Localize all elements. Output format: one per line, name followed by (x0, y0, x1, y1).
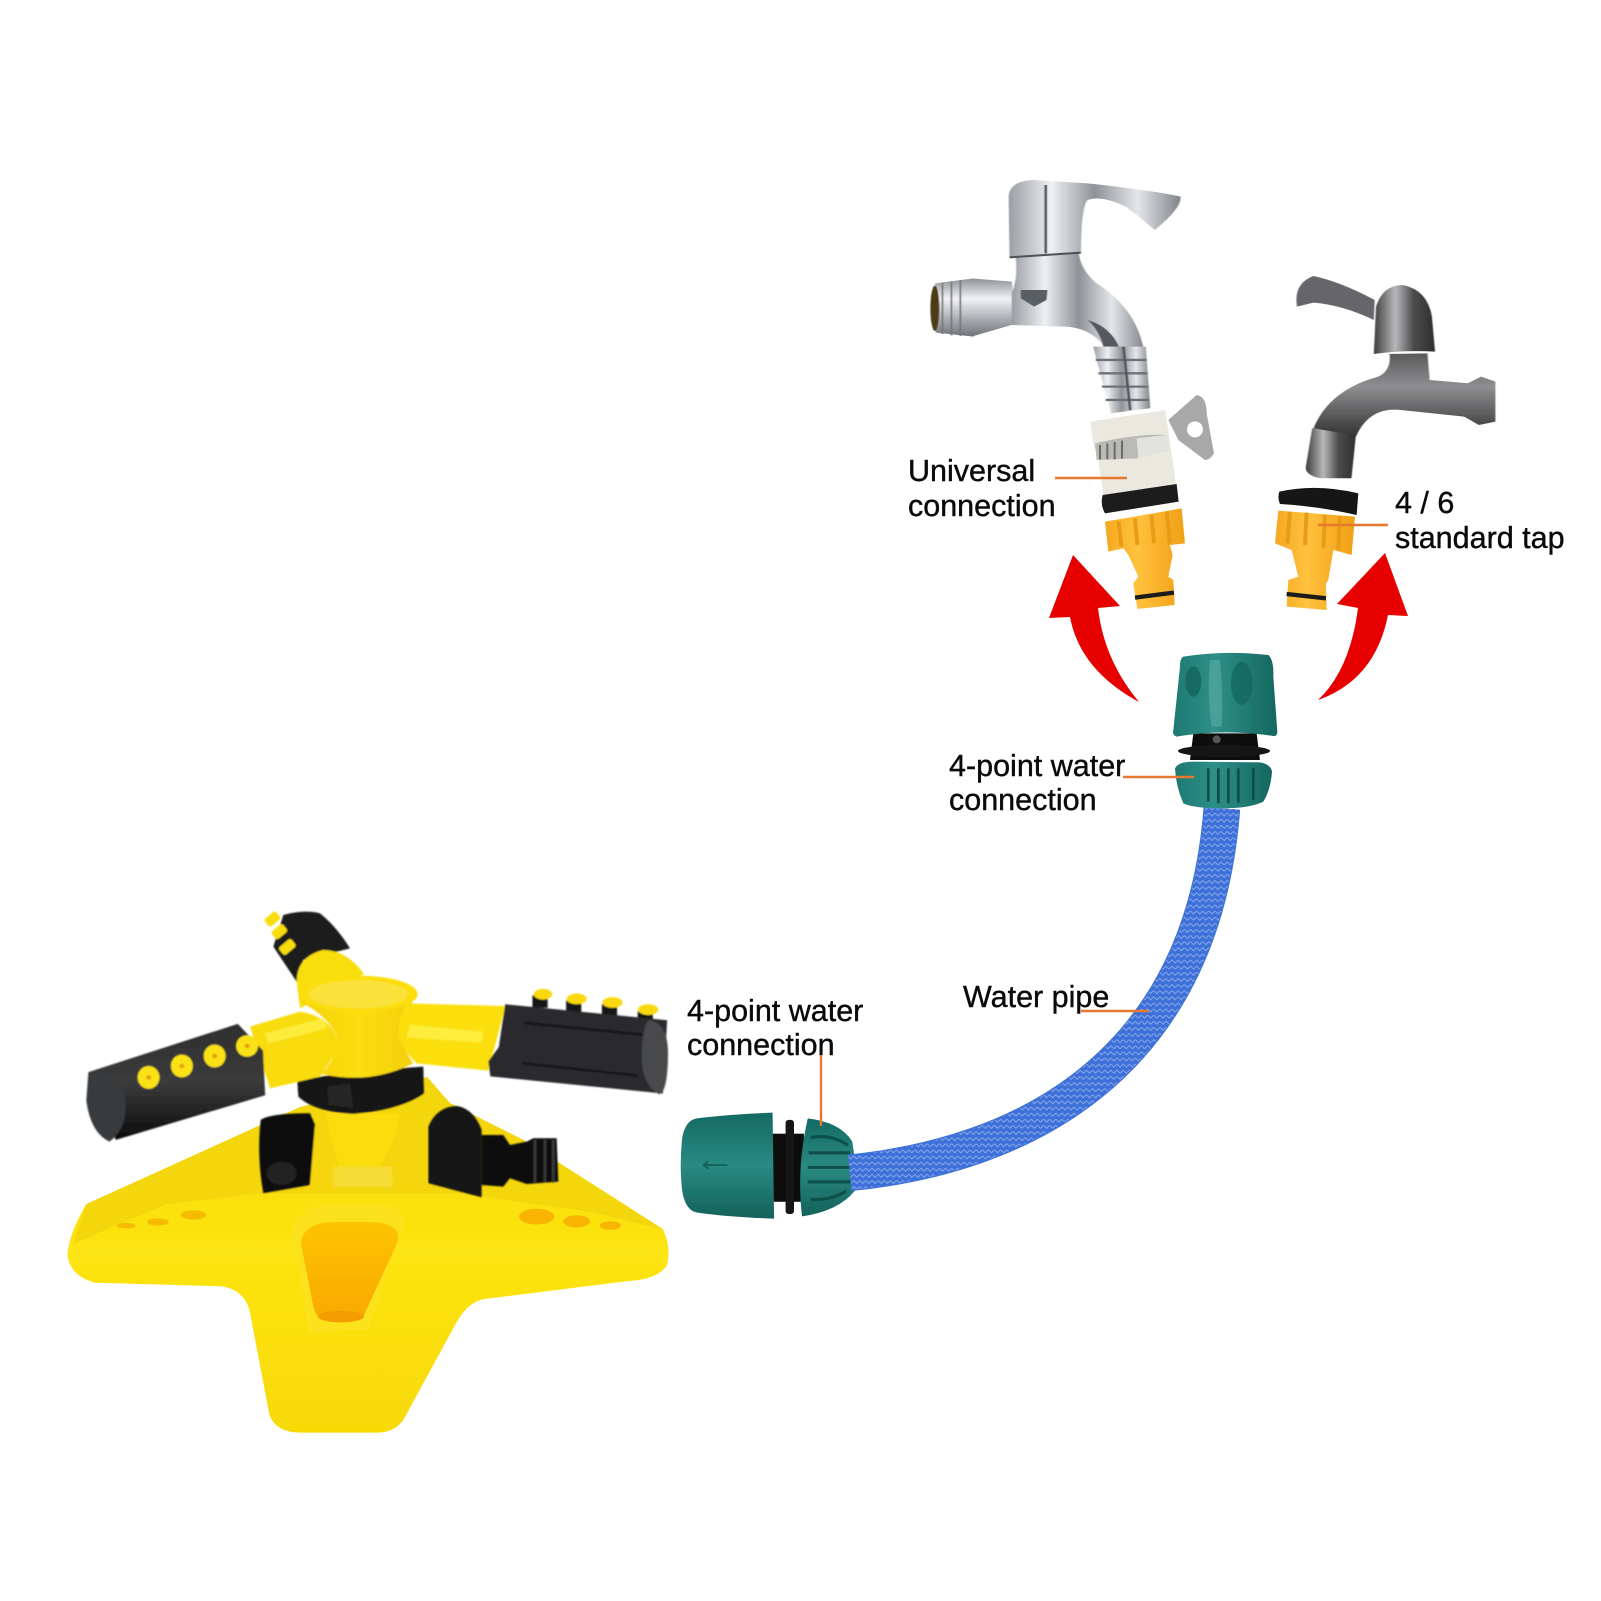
orange adapter (1105, 508, 1185, 609)
top connector (1173, 653, 1277, 808)
red arrow left (1049, 555, 1139, 702)
standard tap adapter (1275, 488, 1358, 610)
label: universal connection (908, 454, 1127, 523)
label: universal connection: Universal (908, 454, 1035, 488)
red arrow right (1318, 553, 1408, 700)
black coupling centre (1178, 733, 1270, 760)
connector wing nut (1168, 395, 1214, 460)
chrome tap (930, 180, 1181, 413)
sprinkler head (86, 911, 668, 1197)
water pipe (850, 808, 1222, 1173)
tap head (1374, 285, 1435, 354)
hub body (300, 986, 417, 1078)
black coupling centre (770, 1120, 804, 1214)
connector collar (1091, 410, 1176, 495)
right black cylinder (488, 989, 668, 1094)
quick connector cap (681, 1113, 774, 1219)
label: top 4-point water connection: 4-point water (949, 749, 1125, 783)
label: universal connection: connection (908, 489, 1056, 523)
bottom connector (681, 1113, 855, 1219)
black ring (1102, 484, 1179, 513)
back arm (264, 911, 364, 1008)
tap body and spout (1012, 253, 1145, 357)
label: bottom 4-point water connection (687, 994, 863, 1126)
hub top (299, 976, 418, 1012)
ribbed nut (800, 1118, 855, 1216)
universal connector with adapter (1091, 395, 1214, 609)
ribbed nut (1175, 762, 1272, 808)
locking ring (297, 1067, 424, 1114)
tap handle lever (1296, 276, 1375, 320)
label: top 4-point water connection: connection (949, 783, 1097, 817)
orange adapter (1275, 511, 1355, 610)
label: 4 / 6 standard tap (1318, 486, 1565, 555)
left arm (250, 1012, 340, 1088)
left black cylinder (86, 1024, 265, 1142)
sprinkler base (67, 1077, 669, 1433)
steel tap (1296, 276, 1495, 478)
threaded inlet (930, 278, 1017, 337)
tap body and outlet (1306, 353, 1495, 478)
label: bottom 4-point water connection: 4-point water (687, 994, 863, 1028)
label: 4 / 6 standard tap: standard tap (1395, 521, 1565, 555)
right arm (398, 1003, 506, 1071)
centre stem and knobs (259, 1106, 558, 1197)
flexible ribbed hose (1093, 347, 1150, 413)
quick connector cap (1173, 653, 1277, 737)
tap handle (1009, 180, 1181, 257)
black ring (1278, 488, 1358, 515)
label: 4 / 6 standard tap: 4 / 6 (1395, 486, 1454, 520)
label: water pipe: Water pipe (963, 980, 1109, 1014)
label: bottom 4-point water connection: connection (687, 1028, 835, 1062)
label: top 4-point water connection (949, 749, 1194, 817)
